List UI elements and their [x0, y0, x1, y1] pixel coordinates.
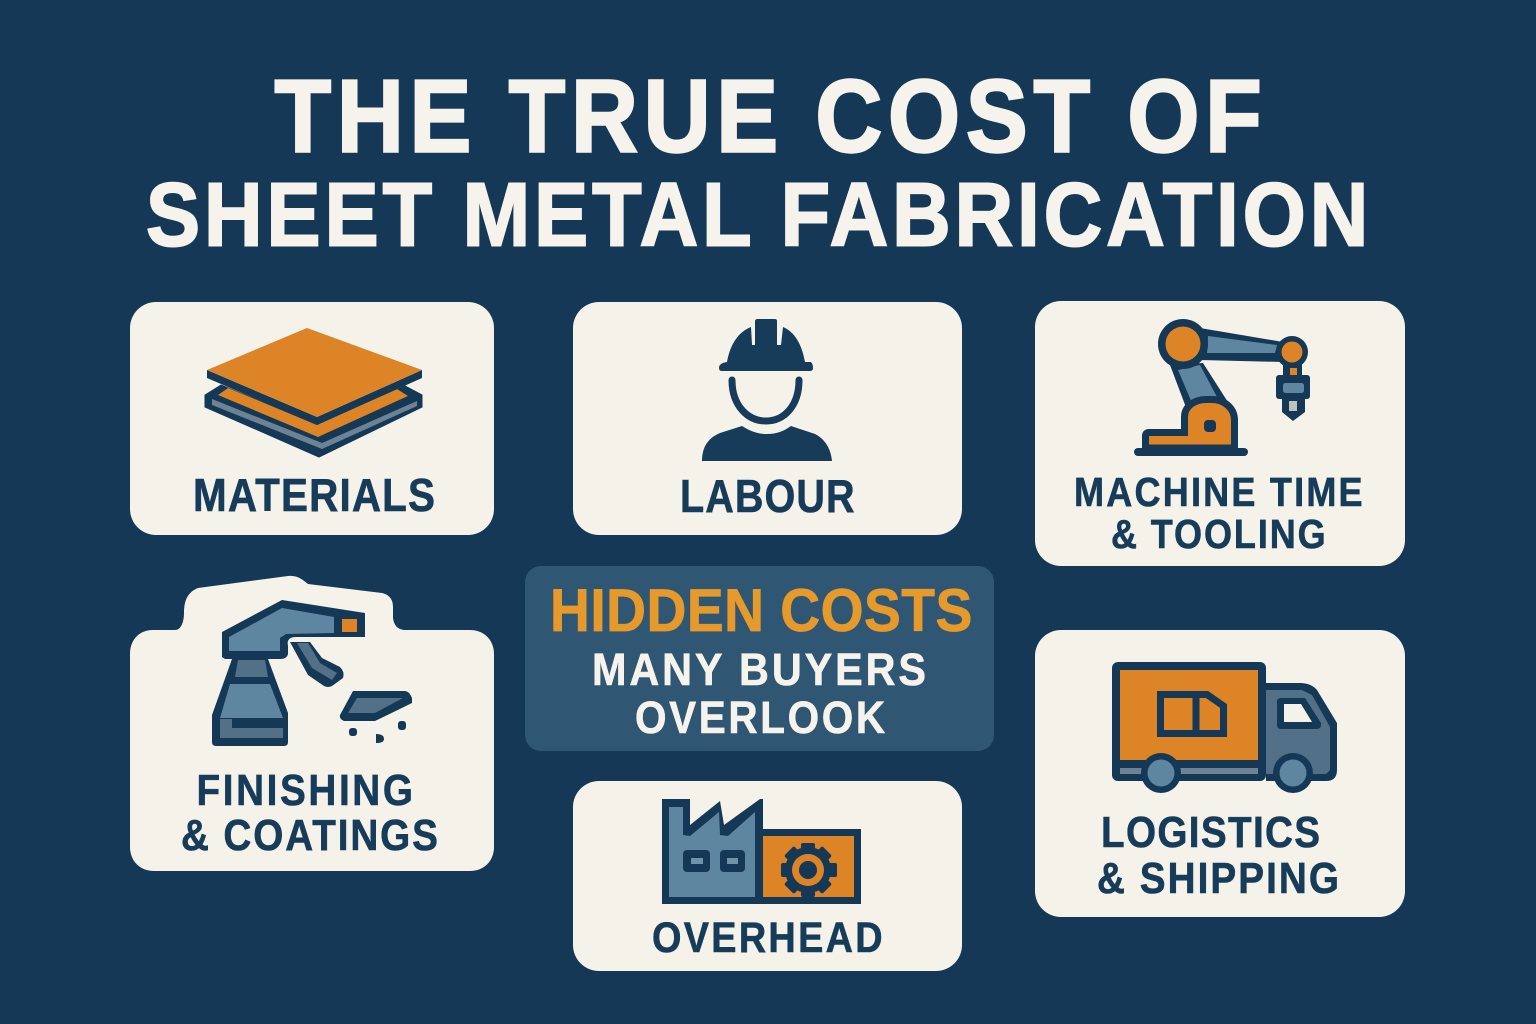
label: logistics: LOGISTICS	[1101, 807, 1320, 857]
icon: stacked metal sheets	[205, 328, 422, 457]
title	[146, 58, 1368, 265]
icon: robot arm	[1134, 319, 1310, 456]
label: and shipping: & SHIPPING	[1097, 853, 1339, 903]
label: and tooling: & TOOLING	[1111, 512, 1326, 558]
panel: hidden costs callout	[525, 566, 994, 751]
panel: materials	[130, 302, 494, 535]
panel: labour	[573, 302, 962, 535]
label: machine time: MACHINE TIME	[1074, 470, 1363, 516]
panel: finishing and coatings	[130, 576, 494, 871]
callout text: many buyers: MANY BUYERS	[592, 645, 926, 695]
callout text: overlook: OVERLOOK	[635, 693, 885, 744]
icon: worker with hard hat	[702, 319, 832, 461]
title: THE TRUE COST OF	[274, 58, 1262, 174]
label: overhead: OVERHEAD	[652, 913, 883, 962]
panel: overhead	[573, 781, 962, 971]
icon: factory with gear	[662, 799, 861, 904]
title: SHEET METAL FABRICATION	[146, 165, 1368, 265]
icon: spray bottle	[212, 600, 412, 746]
panel: logistics and shipping	[1035, 630, 1405, 917]
label: materials: MATERIALS	[193, 471, 435, 522]
panel: machine time and tooling	[1035, 301, 1405, 566]
label: labour: LABOUR	[680, 471, 855, 523]
icon: delivery truck	[1112, 662, 1337, 793]
label: and coatings: & COATINGS	[181, 810, 438, 860]
label: finishing: FINISHING	[196, 765, 413, 815]
callout heading: hidden costs: HIDDEN COSTS	[550, 578, 972, 645]
